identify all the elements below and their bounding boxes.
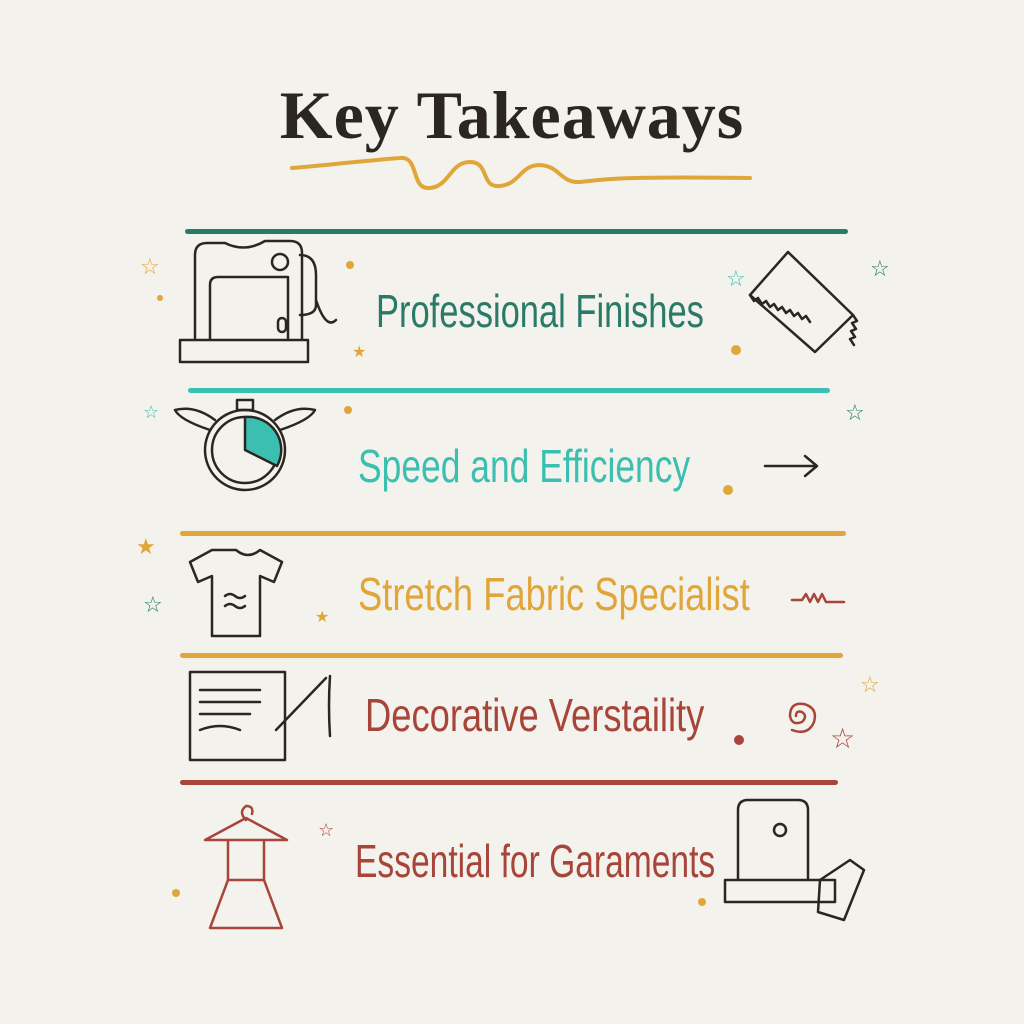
decorations: stars and dots: ☆ [860,673,880,698]
icon: scroll and needle [190,672,330,760]
row 2 heading: Speed and Efficiency [358,440,690,492]
row 3 heading: Stretch Fabric Specialist [358,568,750,620]
decorations: stars and dots: ★ [315,607,329,626]
decorations: stars and dots: ☆ [143,593,163,618]
row 1 heading: Professional Finishes [376,285,704,337]
icon: sewing machine with tag [725,800,864,920]
decorations: stars and dots: ★ [136,535,156,560]
decorations: stars and dots: ☆ [143,402,159,423]
decorations: stars and dots: ☆ [830,722,855,755]
icon: sewing machine [180,241,336,362]
decorations: stars and dots: ☆ [870,257,890,282]
icon: arrow [765,456,817,476]
icon: winged stopwatch [175,400,315,490]
icon: dress on hanger [205,806,287,928]
decorations: stars and dots: ☆ [845,401,865,426]
decorations: stars and dots: ☆ [318,820,334,841]
decorations: stars and dots: ☆ [726,267,746,292]
row 5 heading: Essential for Garaments [355,835,715,887]
title: Key Takeaways [280,77,744,153]
icon: t-shirt [190,550,282,636]
row 4 heading: Decorative Verstaility [365,689,704,741]
icon: lace cloth [750,252,857,352]
icon: zigzag [792,594,844,602]
icon: spiral [790,704,815,732]
decorations: stars and dots: ☆ [140,255,160,280]
decorations: stars and dots: ★ [352,342,366,361]
